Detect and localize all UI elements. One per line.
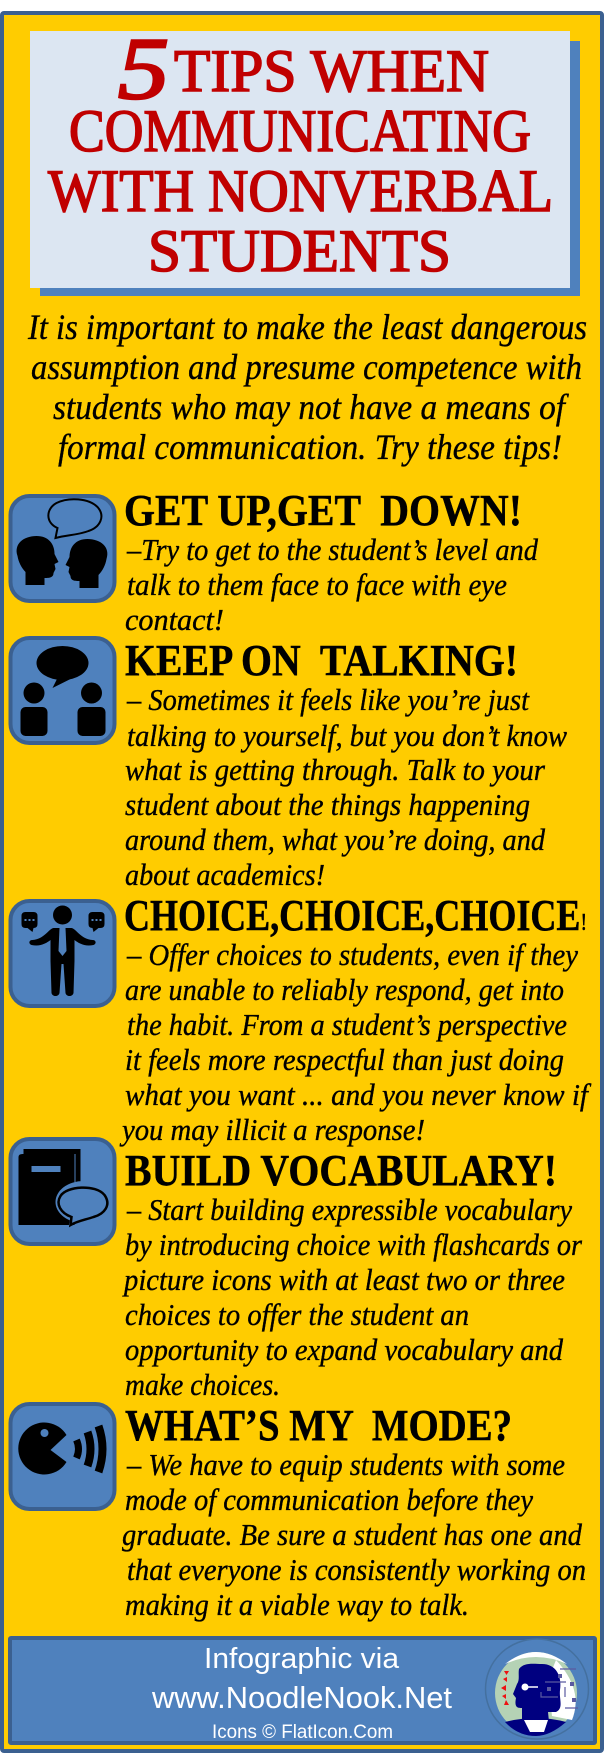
text block: you may illicit a response!	[119, 1112, 425, 1147]
icon: NoodleNook logo	[486, 1639, 588, 1739]
text block: – Offer choices to students, even if they	[126, 937, 578, 972]
title: COMMUNICATING	[69, 98, 531, 164]
text block: make choices.	[125, 1367, 280, 1402]
title: STUDENTS	[148, 218, 451, 284]
panel: tip 3	[10, 891, 592, 1147]
heading: KEEP ON TALKING!	[125, 636, 518, 685]
icon: speaking head with sound waves	[10, 1404, 114, 1509]
text block	[125, 532, 538, 637]
text block: about academics!	[125, 857, 325, 892]
intro text	[27, 307, 587, 467]
icon: two people talking	[10, 638, 114, 743]
text block: – Sometimes it feels like you’re just	[126, 682, 530, 717]
icon: book with speech bubble	[10, 1139, 114, 1244]
text block: by introducing choice with flashcards or	[125, 1227, 583, 1262]
title panel	[30, 21, 580, 296]
text block	[122, 1192, 583, 1402]
panel: tip 1	[10, 486, 538, 637]
title: WITH NONVERBAL	[48, 158, 553, 224]
heading: WHAT’S MY MODE?	[125, 1401, 512, 1450]
text block: – Start building expressible vocabulary	[126, 1192, 572, 1227]
text block: opportunity to expand vocabulary and	[125, 1332, 563, 1367]
title	[48, 21, 553, 284]
text block: contact!	[125, 602, 224, 637]
title: 5	[118, 21, 169, 118]
footer panel	[10, 1638, 595, 1743]
title: TIPS WHEN	[174, 38, 489, 104]
footer credit text: Infographic via	[204, 1643, 400, 1675]
text block: choices to offer the student an	[125, 1297, 469, 1332]
panel: tip 4	[10, 1139, 583, 1402]
text block: –Try to get to the student’s level and	[126, 532, 538, 567]
panel: tip 2	[10, 636, 567, 892]
text block: talking to yourself, but you don’t know	[127, 718, 567, 753]
text block: the habit. From a student’s perspective	[127, 1007, 567, 1042]
text block: – We have to equip students with some	[126, 1447, 565, 1482]
intro text: formal communication. Try these tips!	[58, 427, 562, 467]
icon: man with two speech bubbles	[10, 901, 114, 1006]
text block: mode of communication before they	[125, 1482, 533, 1517]
footer credit text	[151, 1643, 452, 1743]
text block: that everyone is consistently working on	[127, 1552, 586, 1587]
text block: graduate. Be sure a student has one and	[122, 1517, 582, 1552]
panel: tip 5	[10, 1401, 586, 1622]
footer credit text: www.NoodleNook.Net	[151, 1680, 452, 1715]
text block	[119, 937, 592, 1147]
intro text: students who may not have a means of	[53, 387, 570, 427]
text block: talk to them face to face with eye	[127, 567, 507, 602]
text block: picture icons with at least two or three	[122, 1262, 565, 1297]
heading: GET UP,GET DOWN!	[124, 486, 522, 535]
text block: it feels more respectful than just doing	[125, 1042, 564, 1077]
text block	[125, 682, 567, 892]
text block: what you want ... and you never know if	[125, 1077, 592, 1112]
heading: BUILD VOCABULARY!	[125, 1146, 557, 1195]
text block: around them, what you’re doing, and	[125, 822, 545, 857]
text block: are unable to reliably respond, get into	[125, 972, 564, 1007]
text block: making it a viable way to talk.	[125, 1587, 469, 1622]
text block: what is getting through. Talk to your	[125, 752, 546, 787]
icon: two heads with speech bubble	[10, 496, 114, 601]
text block	[122, 1447, 586, 1622]
text block: student about the things happening	[125, 787, 530, 822]
footer credit text: Icons © FlatIcon.Com	[212, 1722, 393, 1743]
